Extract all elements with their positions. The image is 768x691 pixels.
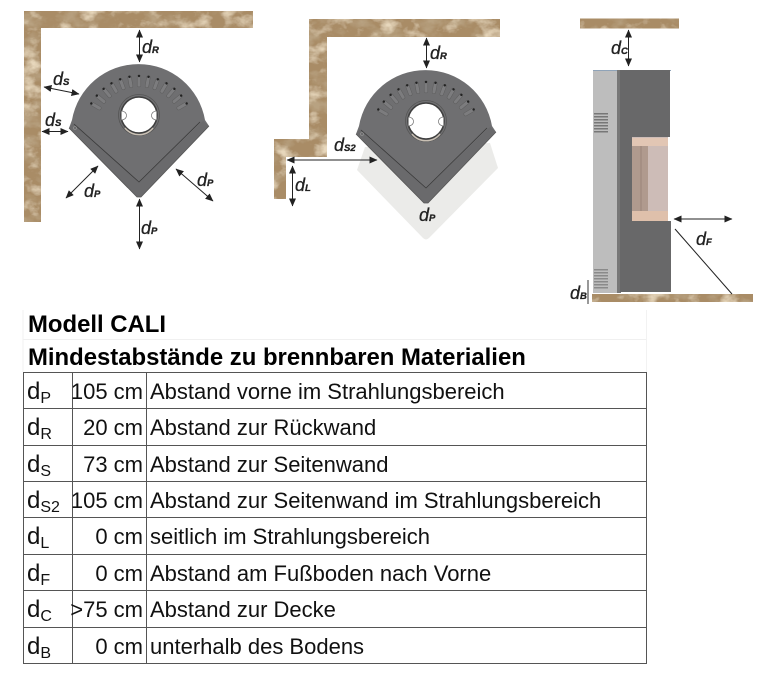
icon: stove top view — [356, 70, 496, 203]
row: dC — [27, 596, 336, 625]
row: dC: >75 cm — [70, 597, 143, 622]
arrows and labels: side distances — [570, 30, 732, 304]
row: dS: Abstand zur Seitenwand — [150, 452, 388, 477]
row: dS2: S2 — [40, 499, 60, 516]
row: dL: 0 cm — [95, 524, 143, 549]
row: dC: C — [40, 608, 52, 625]
row: dS2: Abstand zur Seitenwand im Strahlungsbereich — [150, 488, 601, 513]
row: dB: d — [27, 633, 40, 660]
row: dF: 0 cm — [95, 561, 143, 586]
arrows and labels: corner distances — [42, 30, 214, 249]
wall: corner walls — [24, 11, 253, 222]
row: dR — [27, 414, 376, 443]
arrows and labels: corner distances: dS — [53, 69, 70, 89]
arrows and labels: side distances: dB — [570, 283, 587, 303]
row: dB: unterhalb des Bodens — [150, 634, 364, 659]
arrows and labels: corner distances: dP — [84, 181, 101, 201]
row: dP: 105 cm — [71, 379, 143, 404]
arrows and labels: stepped wall distances: dR — [430, 43, 447, 63]
icon: radiation area ghost — [357, 143, 498, 240]
row: dF: Abstand am Fußboden nach Vorne — [150, 561, 491, 586]
row: dC: Abstand zur Decke — [150, 597, 336, 622]
row: dF — [27, 560, 491, 589]
row: dS: d — [27, 451, 40, 478]
row: dL — [27, 523, 430, 552]
heading: model name: Modell CALI — [28, 311, 166, 338]
arrows and labels: side distances: dC — [611, 38, 628, 58]
icon: stove side view — [593, 70, 671, 293]
row: dR: R — [40, 426, 52, 443]
table: minimum distances — [23, 310, 647, 664]
row: dP — [27, 378, 505, 407]
arrows and labels: corner distances: dR — [142, 37, 159, 57]
row: dB: 0 cm — [95, 634, 143, 659]
row: dL: seitlich im Strahlungsbereich — [150, 524, 430, 549]
row: dF: F — [40, 572, 50, 589]
row: dL: d — [27, 523, 40, 550]
row: dS2: d — [27, 487, 40, 514]
diagram: corner installation — [24, 11, 253, 249]
arrows and labels: corner distances: dP — [197, 170, 214, 190]
wall: ceiling — [580, 18, 679, 28]
arrows and labels: corner distances: dP — [141, 218, 158, 238]
icon: stove top view — [69, 64, 209, 197]
arrows and labels: corner distances: dS — [45, 110, 62, 130]
row: dS: S — [40, 463, 51, 480]
row: dF: d — [27, 560, 40, 587]
row: dR: 20 cm — [83, 415, 143, 440]
wall: floor — [592, 294, 753, 302]
row: dB: B — [40, 645, 51, 662]
arrows and labels: stepped wall distances — [287, 38, 447, 225]
row: dS — [27, 451, 388, 480]
row: dS2: 105 cm — [71, 488, 143, 513]
row: dL: L — [40, 535, 49, 552]
row: dP: Abstand vorne im Strahlungsbereich — [150, 379, 505, 404]
arrows and labels: stepped wall distances: dL — [295, 175, 311, 195]
arrows and labels: stepped wall distances: dS2 — [334, 135, 356, 155]
row: dS: 73 cm — [83, 452, 143, 477]
row: dP: P — [40, 390, 51, 407]
arrows and labels: stepped wall distances: dP — [419, 205, 436, 225]
heading: table subtitle: Mindestabstände zu brennbaren Materialien — [28, 344, 526, 371]
row: dR: Abstand zur Rückwand — [150, 415, 376, 440]
diagram: side view — [570, 18, 753, 304]
row: dS2 — [27, 487, 601, 516]
row: dR: d — [27, 414, 40, 441]
diagram: stepped wall installation — [274, 19, 500, 240]
wall: stepped wall — [274, 19, 500, 199]
arrows and labels: side distances: dF — [696, 229, 712, 249]
row: dP: d — [27, 378, 40, 405]
row: dB — [27, 633, 364, 662]
row: dC: d — [27, 596, 40, 623]
